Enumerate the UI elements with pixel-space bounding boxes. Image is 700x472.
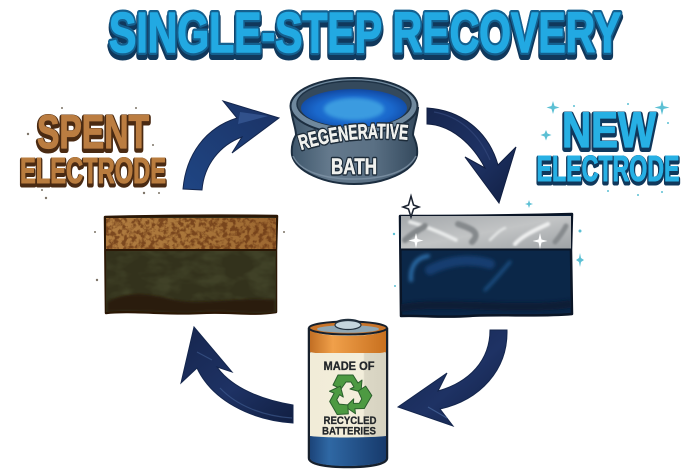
battery: BATTERIES	[322, 426, 376, 438]
arrow: spent electrode to bath	[183, 101, 279, 190]
arrow: bath to new electrode	[427, 108, 516, 203]
silver top band	[401, 216, 571, 249]
bath label: BATH	[331, 154, 377, 179]
panel: new electrode	[400, 196, 572, 317]
sparkles around new electrode	[393, 100, 670, 287]
bath body	[291, 108, 418, 184]
heading: new electrode	[536, 102, 680, 191]
heading: spent electrode: ELECTRODE	[20, 150, 166, 191]
battery	[309, 320, 387, 467]
blue sheen	[402, 256, 570, 308]
label text: made of: MADE OF	[324, 359, 374, 373]
specks around spent electrode	[27, 107, 285, 281]
divider line	[105, 249, 277, 251]
lower body mottling	[107, 251, 275, 301]
water highlight	[324, 98, 384, 120]
silver streaks	[405, 222, 566, 244]
bath label	[296, 122, 410, 179]
bath water	[301, 89, 407, 127]
bath lower band	[293, 156, 416, 179]
bath label: REGENERATIVE	[296, 122, 410, 152]
heading: spent electrode: SPENT	[37, 107, 149, 160]
battery terminal	[335, 320, 361, 332]
label text: recycled batteries: RECYCLED	[324, 415, 377, 427]
heading: new electrode: NEW	[562, 104, 657, 160]
heading: spent electrode: SPENT	[37, 105, 149, 158]
arrow: new electrode to battery	[398, 330, 507, 426]
orange top band	[310, 330, 386, 354]
heading: spent electrode: ELECTRODE	[20, 152, 166, 193]
cream label	[310, 353, 386, 437]
arrow: battery to spent electrode	[181, 327, 293, 423]
battery top inset	[317, 325, 379, 333]
corroded top band	[106, 218, 276, 250]
battery body	[309, 329, 387, 467]
regenerative bath	[290, 77, 420, 185]
outlined star	[403, 196, 419, 217]
rust texture	[106, 218, 276, 250]
divider line	[400, 248, 572, 250]
battery top ring	[309, 322, 387, 334]
dark lower body	[106, 250, 276, 313]
blue bottom band	[310, 436, 386, 466]
grime shading	[107, 294, 275, 313]
heading: new electrode: NEW	[562, 102, 657, 158]
battery terminal cap	[335, 320, 361, 330]
heading: spent electrode	[20, 105, 166, 193]
bath label: REGENERATIVE	[298, 124, 408, 150]
sparkle highlights	[408, 233, 548, 249]
bath inner wall	[297, 81, 411, 127]
bath rim	[290, 78, 418, 134]
panel: spent electrode	[105, 216, 277, 314]
icon: recycling symbol	[325, 375, 374, 419]
bath label: BATH	[331, 154, 377, 179]
